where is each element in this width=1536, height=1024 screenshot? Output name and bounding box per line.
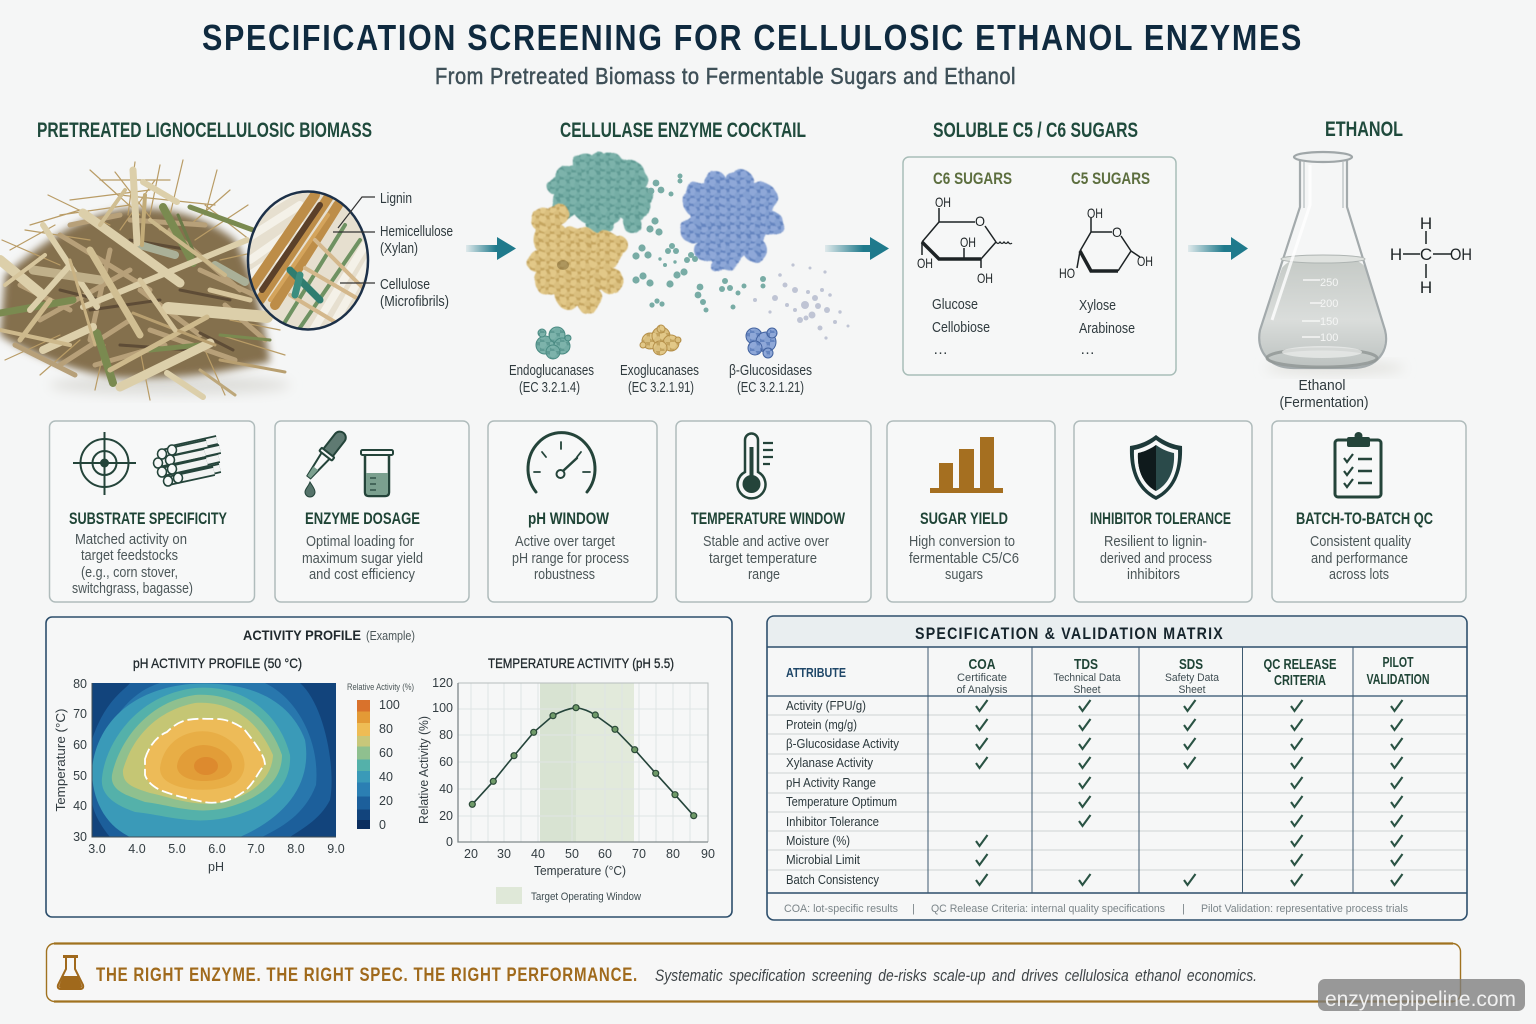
row labels: Moisture (%) bbox=[786, 833, 850, 848]
description bbox=[1310, 533, 1411, 583]
label: beta-glucosidases: (EC 3.2.1.21) bbox=[737, 379, 804, 396]
row labels: Batch Consistency bbox=[786, 872, 879, 887]
matrix footnote: | bbox=[1182, 903, 1185, 915]
matrix footnote: QC Release Criteria: internal quality specifications bbox=[931, 903, 1165, 915]
heatmap axes: 80 bbox=[73, 677, 87, 691]
arrow: sugars to ethanol bbox=[1188, 237, 1248, 260]
description: target feedstocks bbox=[81, 547, 178, 564]
molecule: glucose: O bbox=[975, 213, 985, 229]
heading: ethanol: ETHANOL bbox=[1325, 118, 1403, 141]
column headers: Sheet bbox=[1178, 684, 1206, 696]
card: inhibitor tolerance bbox=[1074, 421, 1252, 602]
sugars box bbox=[903, 157, 1176, 375]
magnified inset of fibres bbox=[245, 190, 375, 335]
heading: biomass: PRETREATED LIGNOCELLULOSIC BIOMASS bbox=[37, 119, 372, 142]
label: ethanol fermentation bbox=[1280, 377, 1368, 411]
line chart: temperature activity: 30 bbox=[497, 847, 511, 861]
column headers: CRITERIA bbox=[1274, 672, 1326, 689]
column headers: Sheet bbox=[1074, 684, 1100, 696]
colour legend: 60 bbox=[379, 746, 393, 760]
label: hemicellulose: (Xylan) bbox=[380, 240, 418, 257]
column headers: QC RELEASE bbox=[1264, 656, 1336, 673]
check marks: SDS bbox=[1184, 700, 1196, 885]
colour legend: 100 bbox=[379, 698, 400, 712]
panel: activity profile bbox=[46, 617, 732, 917]
description: High conversion to bbox=[909, 533, 1015, 550]
heading: SUBSTRATE SPECIFICITY bbox=[69, 509, 227, 528]
icon: bar chart bbox=[930, 437, 1003, 493]
molecule: xylose: O bbox=[1112, 224, 1122, 240]
banner slogan: THE RIGHT ENZYME. THE RIGHT SPEC. THE RIGHT PERFORMANCE. bbox=[96, 964, 638, 986]
check marks: TDS bbox=[1079, 700, 1090, 885]
line chart: temperature activity: 50 bbox=[565, 847, 579, 861]
heading: TEMPERATURE WINDOW bbox=[691, 509, 846, 528]
icon: gauge bbox=[528, 433, 595, 492]
label: cellulose: (Microfibrils) bbox=[380, 293, 449, 310]
check marks: pilot validation bbox=[1391, 700, 1402, 885]
description: robustness bbox=[534, 566, 595, 583]
chart title: temperature activity: TEMPERATURE ACTIVITY (pH 5.5) bbox=[488, 655, 674, 671]
card: substrate specificity bbox=[50, 421, 254, 602]
line chart: temperature activity: 40 bbox=[439, 782, 453, 796]
list: C6 sugars: … bbox=[933, 341, 948, 358]
label: exoglucanases: (EC 3.2.1.91) bbox=[628, 379, 694, 396]
matrix footnote: | bbox=[912, 903, 915, 915]
heatmap axes bbox=[54, 677, 345, 874]
description: fermentable C5/C6 bbox=[909, 550, 1019, 567]
molecule: ethanol formula: H bbox=[1420, 278, 1432, 297]
label: beta-glucosidases bbox=[729, 362, 812, 396]
list: C6 sugars bbox=[932, 296, 990, 358]
label: hemicellulose bbox=[380, 223, 453, 257]
heatmap axes: 8.0 bbox=[287, 842, 305, 856]
row labels: β-Glucosidase Activity bbox=[786, 736, 899, 751]
molecule: ethanol formula: H bbox=[1420, 214, 1432, 233]
protein cluster: teal bbox=[547, 151, 652, 236]
description: inhibitors bbox=[1127, 566, 1180, 583]
description bbox=[512, 533, 629, 583]
heading: sugars: SOLUBLE C5 / C6 SUGARS bbox=[933, 119, 1138, 142]
row labels: pH Activity Range bbox=[786, 775, 876, 790]
heatmap axes: pH bbox=[208, 860, 224, 874]
panel: specification matrix bbox=[767, 616, 1467, 920]
row labels bbox=[786, 698, 899, 887]
description: derived and process bbox=[1100, 550, 1212, 567]
molecule: glucose: OH bbox=[917, 255, 933, 271]
colour legend: 0 bbox=[379, 818, 386, 832]
column headers: of Analysis bbox=[956, 684, 1008, 696]
molecule: glucose bbox=[917, 194, 1012, 286]
legend icon: exoglucanase bbox=[640, 325, 681, 355]
molecule: ethanol formula: C bbox=[1420, 245, 1432, 264]
panel heading: ACTIVITY PROFILE bbox=[243, 627, 361, 643]
row labels: Activity (FPU/g) bbox=[786, 698, 866, 713]
label: ethanol fermentation: (Fermentation) bbox=[1280, 394, 1368, 411]
card: sugar yield bbox=[887, 421, 1055, 602]
description: Resilient to lignin- bbox=[1104, 533, 1207, 550]
row labels: Xylanase Activity bbox=[786, 755, 873, 770]
card: enzyme dosage bbox=[275, 421, 469, 602]
line chart: temperature activity: 90 bbox=[701, 847, 715, 861]
colour legend: Relative Activity (%) bbox=[347, 682, 414, 692]
legend icon: endoglucanase bbox=[536, 327, 571, 359]
column headers: ATTRIBUTE bbox=[786, 665, 846, 680]
card: pH window bbox=[488, 421, 657, 602]
description: Consistent quality bbox=[1310, 533, 1411, 550]
icon: target and fibre bundle bbox=[73, 432, 220, 495]
colour legend: 20 bbox=[379, 794, 393, 808]
description bbox=[72, 531, 193, 597]
heatmap axes: Temperature (°C) bbox=[54, 708, 68, 812]
icon: shield bbox=[1130, 435, 1182, 500]
colour legend: 80 bbox=[379, 722, 393, 736]
biomass pile bbox=[0, 160, 290, 400]
heading: C5 sugars: C5 SUGARS bbox=[1071, 169, 1150, 188]
description: pH range for process bbox=[512, 550, 629, 567]
description bbox=[909, 533, 1019, 583]
icon: flask bbox=[58, 955, 83, 989]
list: C5 sugars: Xylose bbox=[1079, 297, 1116, 314]
icon: dropper and tube bbox=[303, 428, 393, 497]
heading: ENZYME DOSAGE bbox=[305, 509, 420, 528]
molecule: xylose: HO bbox=[1059, 265, 1075, 281]
list: C5 sugars bbox=[1079, 297, 1135, 358]
heatmap axes: 4.0 bbox=[128, 842, 146, 856]
fibre leader lines bbox=[333, 197, 375, 283]
label: endoglucanases: Endoglucanases bbox=[509, 362, 594, 379]
molecule: ethanol formula bbox=[1390, 214, 1472, 297]
heatmap axes: 6.0 bbox=[208, 842, 226, 856]
list: C6 sugars: Glucose bbox=[932, 296, 978, 313]
description: target temperature bbox=[709, 550, 817, 567]
molecule: xylose: OH bbox=[1137, 253, 1153, 269]
watermark: enzymepipeline.com bbox=[1325, 988, 1516, 1011]
icon: clipboard bbox=[1335, 432, 1381, 497]
colour legend: 40 bbox=[379, 770, 393, 784]
column headers: PILOT bbox=[1382, 654, 1414, 671]
label: exoglucanases: Exoglucanases bbox=[620, 362, 699, 379]
description: range bbox=[748, 566, 780, 583]
heading: C6 sugars: C6 SUGARS bbox=[933, 169, 1012, 188]
heatmap axes: 50 bbox=[73, 769, 87, 783]
line chart: temperature activity: 20 bbox=[464, 847, 478, 861]
check marks: QC release bbox=[1291, 700, 1302, 885]
molecule: xylose bbox=[1059, 205, 1153, 281]
heatmap axes: 3.0 bbox=[88, 842, 106, 856]
description: across lots bbox=[1329, 566, 1389, 583]
card: temperature window bbox=[676, 421, 871, 602]
molecule: ethanol formula: OH bbox=[1450, 245, 1472, 264]
panel: enzyme cocktail bbox=[509, 119, 850, 396]
molecule: glucose: OH bbox=[935, 194, 951, 210]
protein cluster: yellow bbox=[527, 203, 628, 314]
chart legend: target window bbox=[496, 887, 641, 904]
label: cellulose bbox=[380, 276, 449, 310]
molecule: glucose: OH bbox=[960, 234, 976, 250]
row labels: Inhibitor Tolerance bbox=[786, 814, 879, 829]
protein cluster: blue bbox=[680, 169, 784, 273]
arrow: biomass to enzymes bbox=[466, 237, 516, 260]
column headers: VALIDATION bbox=[1366, 671, 1430, 688]
column headers: TDS bbox=[1074, 656, 1098, 673]
panel: sugars bbox=[903, 119, 1176, 375]
legend icon: beta-glucosidase bbox=[746, 328, 777, 358]
line chart: temperature activity: 80 bbox=[439, 728, 453, 742]
molecule: glucose: OH bbox=[977, 270, 993, 286]
matrix footnote: Pilot Validation: representative process trials bbox=[1201, 903, 1408, 915]
molecule: xylose: OH bbox=[1087, 205, 1103, 221]
line chart: temperature activity: 60 bbox=[598, 847, 612, 861]
heading: INHIBITOR TOLERANCE bbox=[1090, 509, 1231, 528]
panel: ethanol bbox=[1256, 118, 1472, 411]
icon: thermometer bbox=[738, 434, 773, 498]
column headers: COA bbox=[968, 656, 996, 673]
line chart: temperature activity: 60 bbox=[439, 755, 453, 769]
description: Optimal loading for bbox=[306, 533, 414, 550]
check marks: COA bbox=[976, 700, 988, 885]
heatmap axes: 70 bbox=[73, 707, 87, 721]
flask: 200 bbox=[1320, 298, 1338, 310]
description: and cost efficiency bbox=[309, 566, 415, 583]
description: and performance bbox=[1311, 550, 1408, 567]
list: C6 sugars: Cellobiose bbox=[932, 319, 990, 336]
row labels: Temperature Optimum bbox=[786, 794, 897, 809]
label: hemicellulose: Hemicellulose bbox=[380, 223, 453, 240]
label: endoglucanases: (EC 3.2.1.4) bbox=[519, 379, 580, 396]
row labels: Microbial Limit bbox=[786, 852, 860, 867]
line chart: temperature activity: 40 bbox=[531, 847, 545, 861]
heatmap axes: 40 bbox=[73, 799, 87, 813]
matrix footnote: COA: lot-specific results bbox=[784, 903, 898, 915]
flask: 150 bbox=[1320, 316, 1338, 328]
heading: enzyme cocktail: CELLULASE ENZYME COCKTAIL bbox=[560, 119, 806, 142]
description: Active over target bbox=[515, 533, 616, 550]
column headers: Technical Data bbox=[1054, 672, 1121, 684]
description: sugars bbox=[945, 566, 983, 583]
line chart: temperature activity: 70 bbox=[632, 847, 646, 861]
line chart: temperature activity: Relative Activity (%) bbox=[417, 716, 431, 824]
description bbox=[703, 533, 829, 583]
label: lignin: Lignin bbox=[380, 190, 412, 207]
line chart: temperature activity: 80 bbox=[666, 847, 680, 861]
label: endoglucanases bbox=[509, 362, 594, 396]
matrix title: SPECIFICATION & VALIDATION MATRIX bbox=[915, 625, 1224, 643]
title: SPECIFICATION SCREENING FOR CELLULOSIC ETHANOL ENZYMES bbox=[202, 17, 1303, 58]
line chart: temperature activity: 0 bbox=[446, 835, 453, 849]
line chart: temperature activity: 120 bbox=[432, 676, 453, 690]
heatmap bbox=[92, 683, 336, 837]
arrow: enzymes to sugars bbox=[825, 237, 889, 260]
list: C5 sugars: Arabinose bbox=[1079, 320, 1135, 337]
heading: pH WINDOW bbox=[528, 509, 610, 528]
label: cellulose: Cellulose bbox=[380, 276, 430, 293]
chart title: pH profile: pH ACTIVITY PROFILE (50 °C) bbox=[133, 655, 302, 671]
heatmap axes: 60 bbox=[73, 738, 87, 752]
label: exoglucanases bbox=[620, 362, 699, 396]
heatmap axes: 5.0 bbox=[168, 842, 186, 856]
list: C5 sugars: … bbox=[1080, 341, 1095, 358]
column headers: Certificate bbox=[957, 672, 1007, 684]
card: batch-to-batch QC bbox=[1272, 421, 1466, 602]
column headers: SDS bbox=[1179, 656, 1203, 673]
chart legend: target window: Target Operating Window bbox=[531, 891, 641, 903]
description bbox=[302, 533, 423, 583]
heading: SUGAR YIELD bbox=[920, 509, 1008, 528]
flask: 100 bbox=[1320, 332, 1338, 344]
molecule: ethanol formula: H bbox=[1390, 245, 1402, 264]
line chart: temperature activity bbox=[417, 676, 715, 878]
description: Matched activity on bbox=[75, 531, 187, 548]
description: switchgrass, bagasse) bbox=[72, 580, 193, 597]
watermark bbox=[1318, 979, 1525, 1011]
banner: key message bbox=[46, 944, 1460, 1002]
flask: 250 bbox=[1320, 277, 1338, 289]
description: (e.g., corn stover, bbox=[81, 564, 178, 581]
dissociating fragments bbox=[632, 174, 850, 340]
heatmap axes: 9.0 bbox=[327, 842, 345, 856]
column headers: Safety Data bbox=[1165, 672, 1220, 684]
panel heading: (Example) bbox=[366, 628, 415, 643]
line chart: temperature activity: 100 bbox=[432, 701, 453, 715]
flask bbox=[1256, 152, 1405, 374]
banner description: Systematic specification screening de-risks scale-up and drives cellulosica ethanol economics. bbox=[655, 967, 1257, 985]
label: ethanol fermentation: Ethanol bbox=[1298, 377, 1346, 394]
row labels: Protein (mg/g) bbox=[786, 717, 857, 732]
label: beta-glucosidases: β-Glucosidases bbox=[729, 362, 812, 379]
description: maximum sugar yield bbox=[302, 550, 423, 567]
panel: pretreated biomass bbox=[0, 119, 453, 400]
line chart: temperature activity: Temperature (°C) bbox=[534, 864, 626, 878]
heatmap axes: 30 bbox=[73, 830, 87, 844]
subtitle: From Pretreated Biomass to Fermentable Sugars and Ethanol bbox=[435, 63, 1016, 89]
description: Stable and active over bbox=[703, 533, 829, 550]
column headers bbox=[786, 654, 1430, 696]
matrix footnote bbox=[784, 903, 1408, 915]
colour legend bbox=[347, 682, 414, 832]
line chart: temperature activity: 20 bbox=[439, 809, 453, 823]
heading: BATCH-TO-BATCH QC bbox=[1296, 509, 1433, 528]
description bbox=[1100, 533, 1212, 583]
heatmap axes: 7.0 bbox=[247, 842, 265, 856]
